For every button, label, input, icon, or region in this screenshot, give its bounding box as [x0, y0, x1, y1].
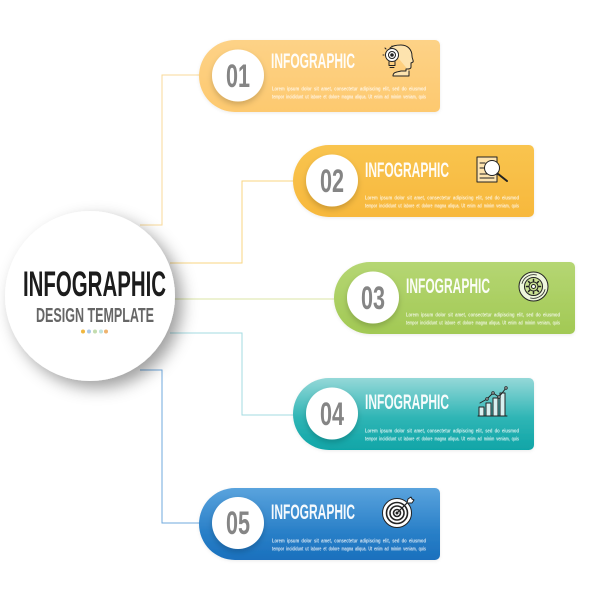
icon: target with arrow: [382, 497, 414, 528]
connector: line to card 1: [140, 75, 200, 225]
card body text: tempor incididunt ut labore et dolore magna aliqua. Ut enim ad minim veniam, quis: [272, 95, 426, 101]
card body text: tempor incididunt ut labore et dolore magna aliqua. Ut enim ad minim veniam, quis: [365, 204, 519, 210]
colour dots: [81, 330, 108, 334]
card title: INFOGRAPHIC: [365, 391, 449, 414]
card body text: Lorem ipsum dolor sit amet, consectetur adipiscing elit, sed do eiusmod: [272, 538, 426, 544]
card title: INFOGRAPHIC: [365, 159, 449, 182]
card 05: [199, 488, 440, 560]
icon: gear with circular arrows: [519, 272, 548, 301]
number 01: 01: [226, 58, 250, 94]
number 05: 05: [226, 505, 250, 541]
central circle with title: [5, 211, 175, 381]
number 02: 02: [320, 163, 344, 199]
icon: rising bar chart: [478, 387, 507, 416]
card 01: [199, 40, 440, 112]
card body text: tempor incididunt ut labore et dolore magna aliqua. Ut enim ad minim veniam, quis: [365, 436, 519, 442]
connector: line to card 2: [170, 181, 294, 263]
card title: INFOGRAPHIC: [271, 50, 355, 73]
subheading: DESIGN TEMPLATE: [36, 305, 154, 327]
card body text: Lorem ipsum dolor sit amet, consectetur adipiscing elit, sed do eiusmod: [365, 428, 519, 434]
card 04: [293, 378, 534, 450]
number 03: 03: [361, 280, 385, 316]
card 03: [334, 262, 575, 334]
card title: INFOGRAPHIC: [406, 275, 490, 298]
card body text: Lorem ipsum dolor sit amet, consectetur adipiscing elit, sed do eiusmod: [272, 87, 426, 93]
connector: line to card 3: [170, 298, 335, 300]
connector: line to card 4: [170, 333, 294, 415]
card body text: tempor incididunt ut labore et dolore magna aliqua. Ut enim ad minim veniam, quis: [272, 546, 426, 552]
card body text: Lorem ipsum dolor sit amet, consectetur adipiscing elit, sed do eiusmod: [365, 196, 519, 202]
number 04: 04: [320, 396, 344, 432]
card title: INFOGRAPHIC: [271, 501, 355, 524]
main heading: INFOGRAPHIC: [23, 265, 166, 304]
connector: line to card 5: [140, 370, 200, 523]
card 02: [293, 145, 534, 217]
icon: head with gear: [383, 45, 413, 76]
icon: magnifier on document: [477, 157, 507, 182]
